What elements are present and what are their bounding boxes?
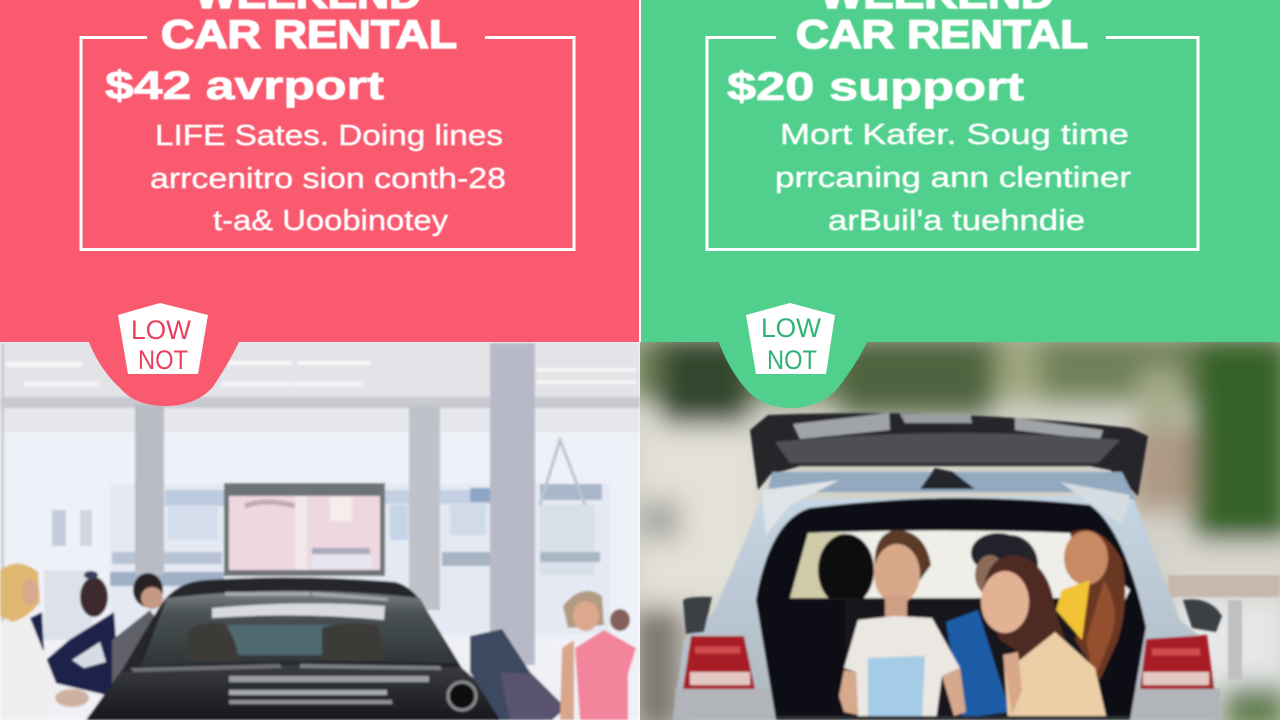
offer description: arrcenitro sion conth-28 [150, 163, 506, 195]
smiling woman in yellow top [1056, 530, 1125, 680]
offer frame [707, 38, 1198, 250]
boy in white t-shirt [839, 530, 966, 720]
silver hatchback body [673, 495, 1222, 720]
badge: low not, green: NOT [767, 345, 817, 375]
open tailgate [750, 413, 1148, 535]
price headline: $42 avrport [105, 64, 384, 108]
offer description: prrcaning ann clentiner [775, 162, 1131, 194]
offer description [775, 119, 1131, 237]
woman in pink top [560, 591, 636, 720]
heading: weekend car rental [161, 0, 457, 57]
photo: family in car boot [630, 335, 1280, 720]
offer description: t-a& Uoobinotey [213, 205, 449, 237]
price headline: $20 support [727, 65, 1024, 109]
boot lower trim [776, 716, 1130, 720]
black rental car [86, 577, 522, 720]
man in blue jacket [944, 532, 1010, 718]
offer frame [81, 38, 574, 250]
blue duffel bag [470, 629, 566, 720]
offer description [150, 120, 506, 237]
ceiling [0, 342, 640, 432]
staff and customers on the left [0, 563, 163, 720]
photo: car rental showroom [0, 342, 640, 720]
heading: weekend car rental: CAR RENTAL [796, 13, 1088, 57]
heading: weekend car rental: CAR RENTAL [161, 13, 457, 57]
digital display board [224, 483, 385, 576]
panel: pink offer [0, 0, 639, 342]
left tail light [683, 636, 755, 689]
offer description: Mort Kafer. Soug time [780, 119, 1129, 151]
badge: low not, pink: LOW [131, 315, 191, 345]
right tail light [1140, 635, 1214, 689]
blurred background [630, 335, 1280, 720]
badge: low not, pink: NOT [138, 345, 188, 375]
badge: low not, green [718, 303, 868, 408]
badge: low not, green: LOW [761, 313, 821, 343]
offer description: LIFE Sates. Doing lines [155, 120, 503, 152]
boot opening interior [756, 498, 1146, 720]
badge: low not, pink [88, 303, 240, 406]
panel: green offer [641, 0, 1280, 342]
offer description: arBuil'a tuehndie [828, 205, 1085, 237]
heading: weekend car rental [796, 0, 1088, 57]
windows and buildings [44, 436, 610, 640]
woman with long brown hair [981, 555, 1107, 720]
